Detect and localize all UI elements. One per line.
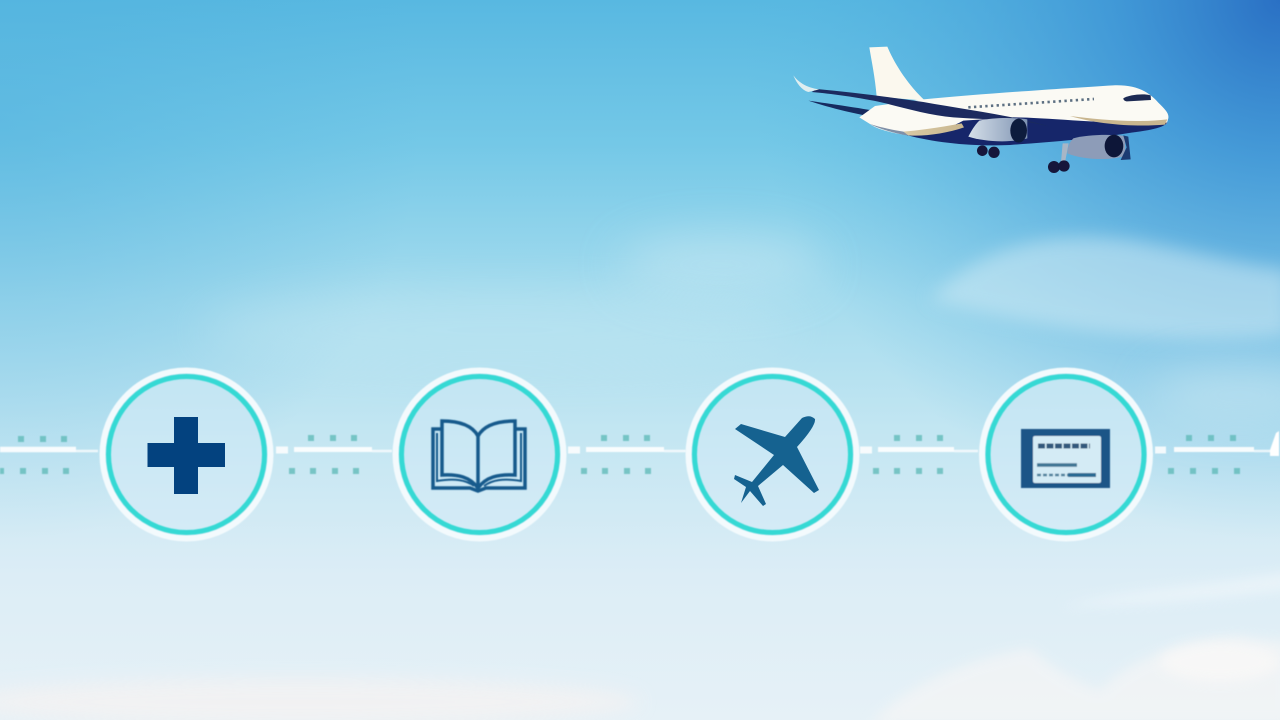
icon: airplane silhouette [734,416,819,506]
navy belly [907,117,1167,145]
airplane photo illustration [793,47,1168,173]
connector lines [0,431,1279,456]
icon badge: airplane [688,370,856,538]
timeline connector [0,431,1279,474]
tail fin [869,47,925,101]
main landing gear [977,145,1000,158]
far engine [1067,135,1125,159]
rear body white [859,85,1168,135]
gold cheat line nose [1070,116,1167,126]
cockpit window [1123,94,1151,101]
icon: open book [433,421,525,491]
icon badge: open book [396,370,564,538]
cabin windows [968,99,1094,107]
icon: medical cross [148,417,225,494]
near engine [968,118,1027,141]
clouds [0,235,1280,720]
engine pylon [1121,135,1131,160]
far wing [808,101,892,119]
near engine intake [1010,119,1027,143]
dot rows [0,435,1240,474]
icon badge: medical cross [102,370,270,538]
near wing [812,89,1050,127]
icon badge: boarding pass [982,370,1150,538]
nose landing gear [1048,143,1070,173]
icon: ticket document [1021,429,1110,488]
far engine intake [1105,135,1123,157]
winglet [793,75,819,92]
gold cheat line rear [903,123,964,136]
rear lower shadow [870,124,920,137]
